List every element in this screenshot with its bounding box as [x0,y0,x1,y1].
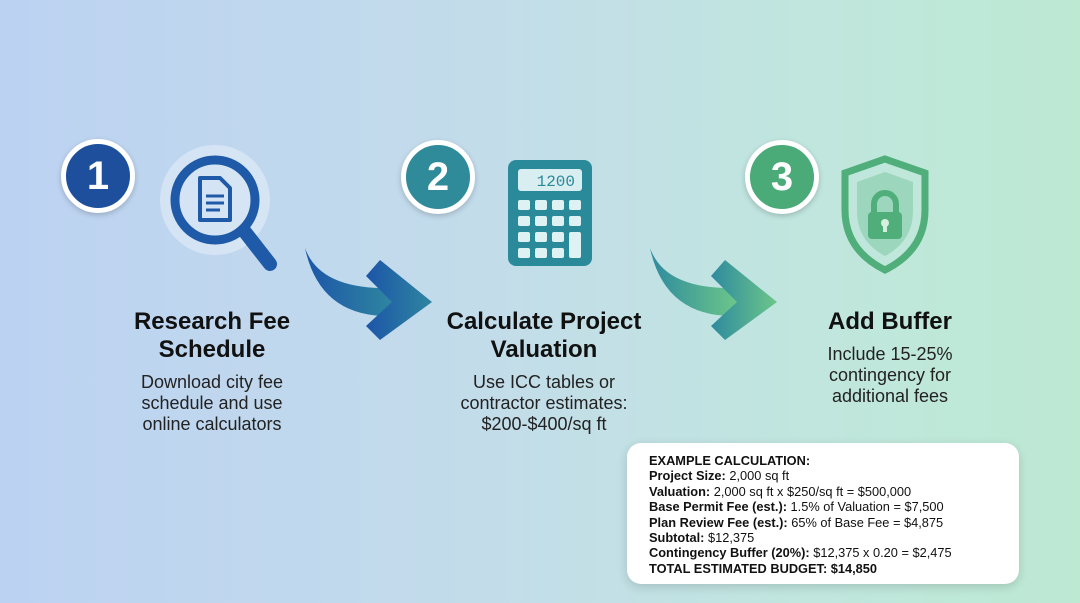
example calculation box: Base Permit Fee (est.): 1.5% of Valuation = $7,500 [649,499,944,514]
arrow 2 [650,248,777,340]
icon: magnifier with document [160,145,277,271]
step 1 title: Research Fee [134,308,290,335]
step 2 title [447,308,642,363]
step 3 number [745,140,819,214]
example calculation box: Contingency Buffer (20%): $12,375 x 0.20 = $2,475 [649,545,952,560]
step 2 number: 2 [427,155,449,199]
step 1 title: Schedule [159,336,265,363]
step 2 title: Calculate Project [447,308,641,335]
icon: calculator [508,160,592,266]
example calculation box: EXAMPLE CALCULATION: [649,453,810,468]
icon: calculator: 1200 [537,173,575,191]
step 1 description [141,372,283,434]
step 2 title: Valuation [491,336,597,363]
step 2 description: Use ICC tables or [473,372,615,392]
step 1 title [134,308,290,363]
example calculation box: Valuation: 2,000 sq ft x $250/sq ft = $500,000 [649,484,911,499]
step 1 description: schedule and use [141,393,283,413]
example calculation box: Project Size: 2,000 sq ft [649,468,789,483]
example calculation box: TOTAL ESTIMATED BUDGET: $14,850 [649,561,877,576]
step 1 description: online calculators [142,414,282,434]
example calculation box: Subtotal: $12,375 [649,530,754,545]
step 3 description: additional fees [832,386,948,406]
step 3 number: 3 [771,155,793,199]
step 2 description: $200-$400/sq ft [481,414,607,434]
example calculation box [627,443,1019,584]
step 2 description: contractor estimates: [460,393,628,413]
step 3 title: Add Buffer [828,308,952,335]
step 1 number: 1 [87,154,109,198]
step 2 number [401,140,475,214]
step 3 description: contingency for [829,365,951,385]
step 1 description: Download city fee [141,372,283,392]
step 3 description [827,344,953,406]
example calculation box: Plan Review Fee (est.): 65% of Base Fee = $4,875 [649,515,943,530]
icon: shield with lock [842,155,928,274]
step 1 number [61,139,135,213]
arrow 1 [305,248,432,340]
step 3 description: Include 15-25% [827,344,953,364]
step 2 description [460,372,628,434]
